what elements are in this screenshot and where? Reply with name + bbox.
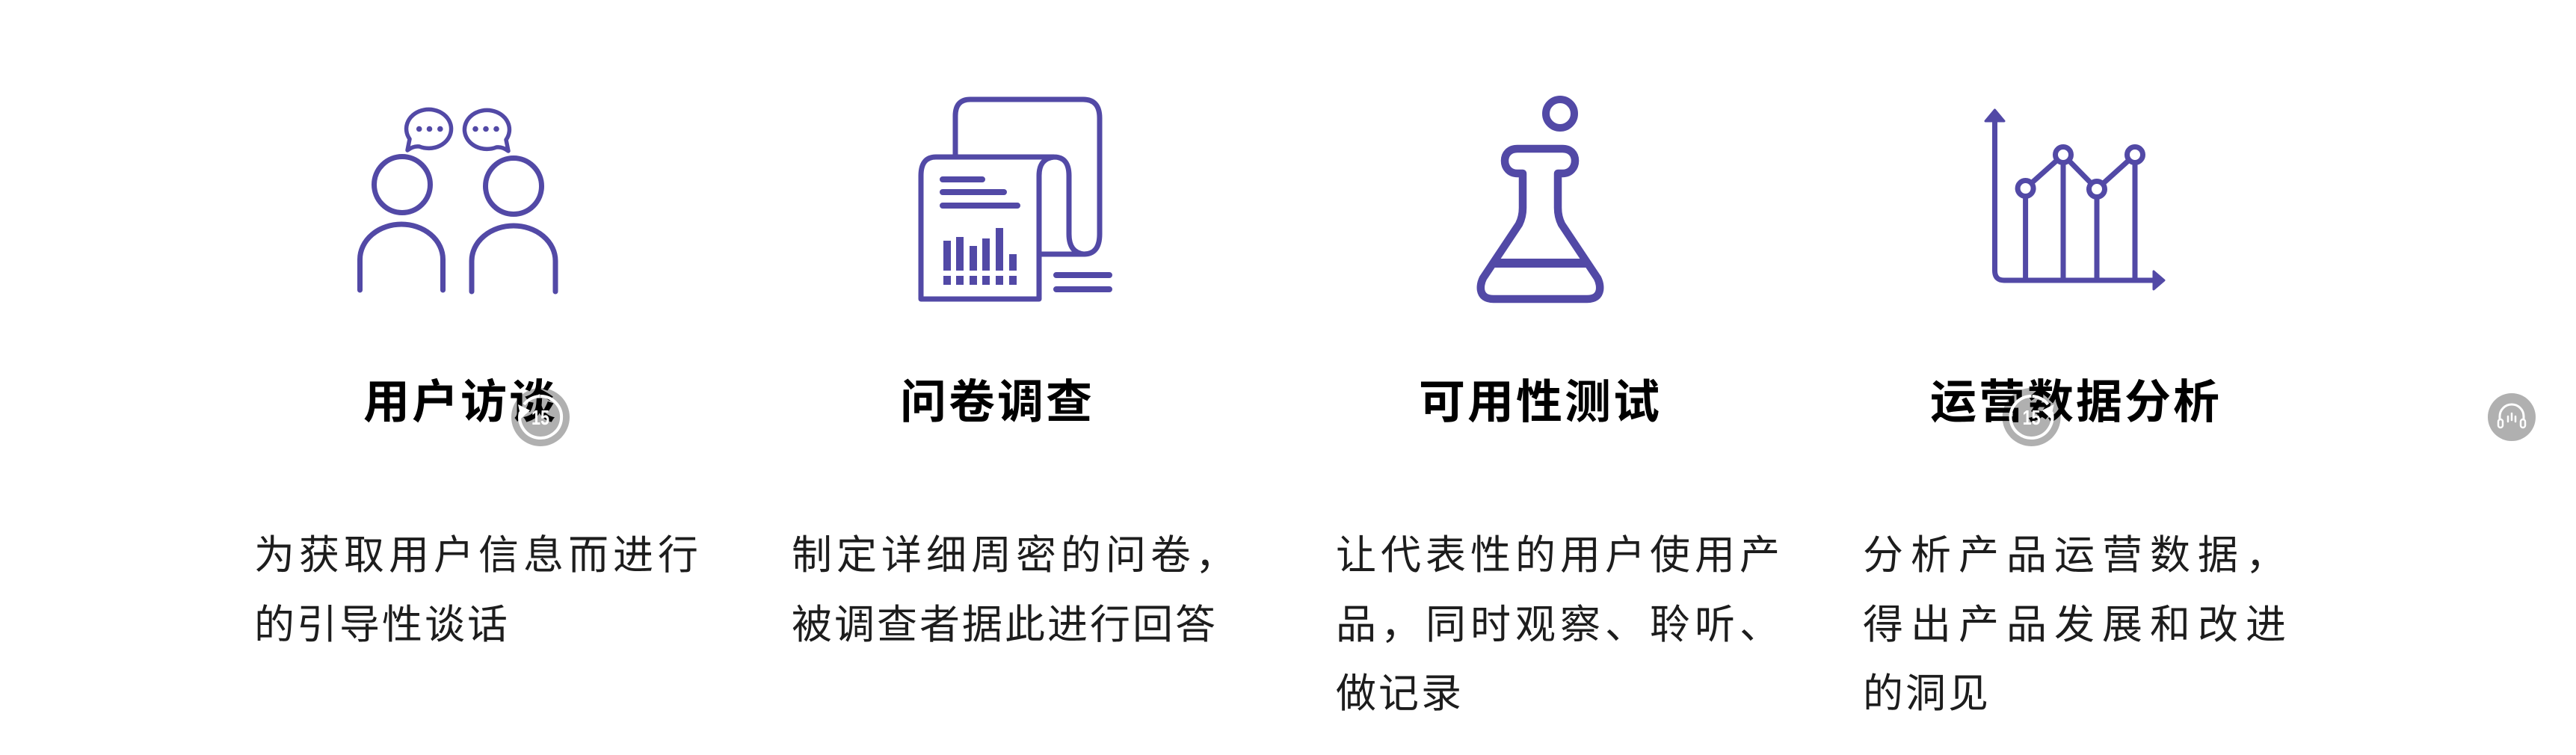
- text: 用户访谈 description: [254, 533, 703, 647]
- panel: 运营数据分析: [1863, 108, 2293, 716]
- panel: 问卷调查: [792, 97, 1240, 647]
- text: 运营数据分析 description: 分析产品运营数据，: [1863, 533, 2293, 578]
- heading: 运营数据分析: 运营数据分析: [1930, 377, 2222, 428]
- text: 用户访谈 description: 的引导性谈话: [254, 603, 510, 647]
- panel: 用户访谈: [254, 108, 703, 647]
- text: 问卷调查 description: 被调查者据此进行回答: [792, 603, 1218, 647]
- text: 问卷调查 description: [792, 533, 1240, 647]
- icon: forward 15 button: 15: [2023, 406, 2041, 429]
- text: 用户访谈 description: 为获取用户信息而进行: [254, 533, 703, 578]
- text: 运营数据分析 description: 得出产品发展和改进: [1863, 603, 2293, 647]
- text: 运营数据分析 description: 的洞见: [1863, 671, 1991, 716]
- text: 可用性测试 description: 让代表性的用户使用产: [1336, 533, 1784, 578]
- icon: paper scroll with chart: [918, 97, 1112, 302]
- text: 可用性测试 description: [1336, 533, 1784, 716]
- icon: two people talking: [357, 108, 558, 295]
- text: 可用性测试 description: 做记录: [1336, 671, 1464, 716]
- text: 运营数据分析 description: [1863, 533, 2293, 716]
- text: 问卷调查 description: 制定详细周密的问卷，: [792, 533, 1240, 578]
- heading: 问卷调查: 问卷调查: [900, 377, 1094, 428]
- heading: 用户访谈: 用户访谈: [363, 377, 558, 428]
- icon: lab flask: [1477, 96, 1604, 303]
- icon: forward 15 button: [2003, 388, 2061, 446]
- icon: rewind 15 button: 15: [531, 406, 549, 429]
- heading: 可用性测试: 可用性测试: [1419, 377, 1662, 428]
- icon: rewind 15 button: [511, 388, 570, 446]
- text: 可用性测试 description: 品，同时观察、聆听、: [1336, 603, 1784, 647]
- panel: 可用性测试: [1336, 96, 1784, 716]
- icon: headset button: [2488, 393, 2536, 441]
- icon: line chart with axes: [1984, 108, 2166, 290]
